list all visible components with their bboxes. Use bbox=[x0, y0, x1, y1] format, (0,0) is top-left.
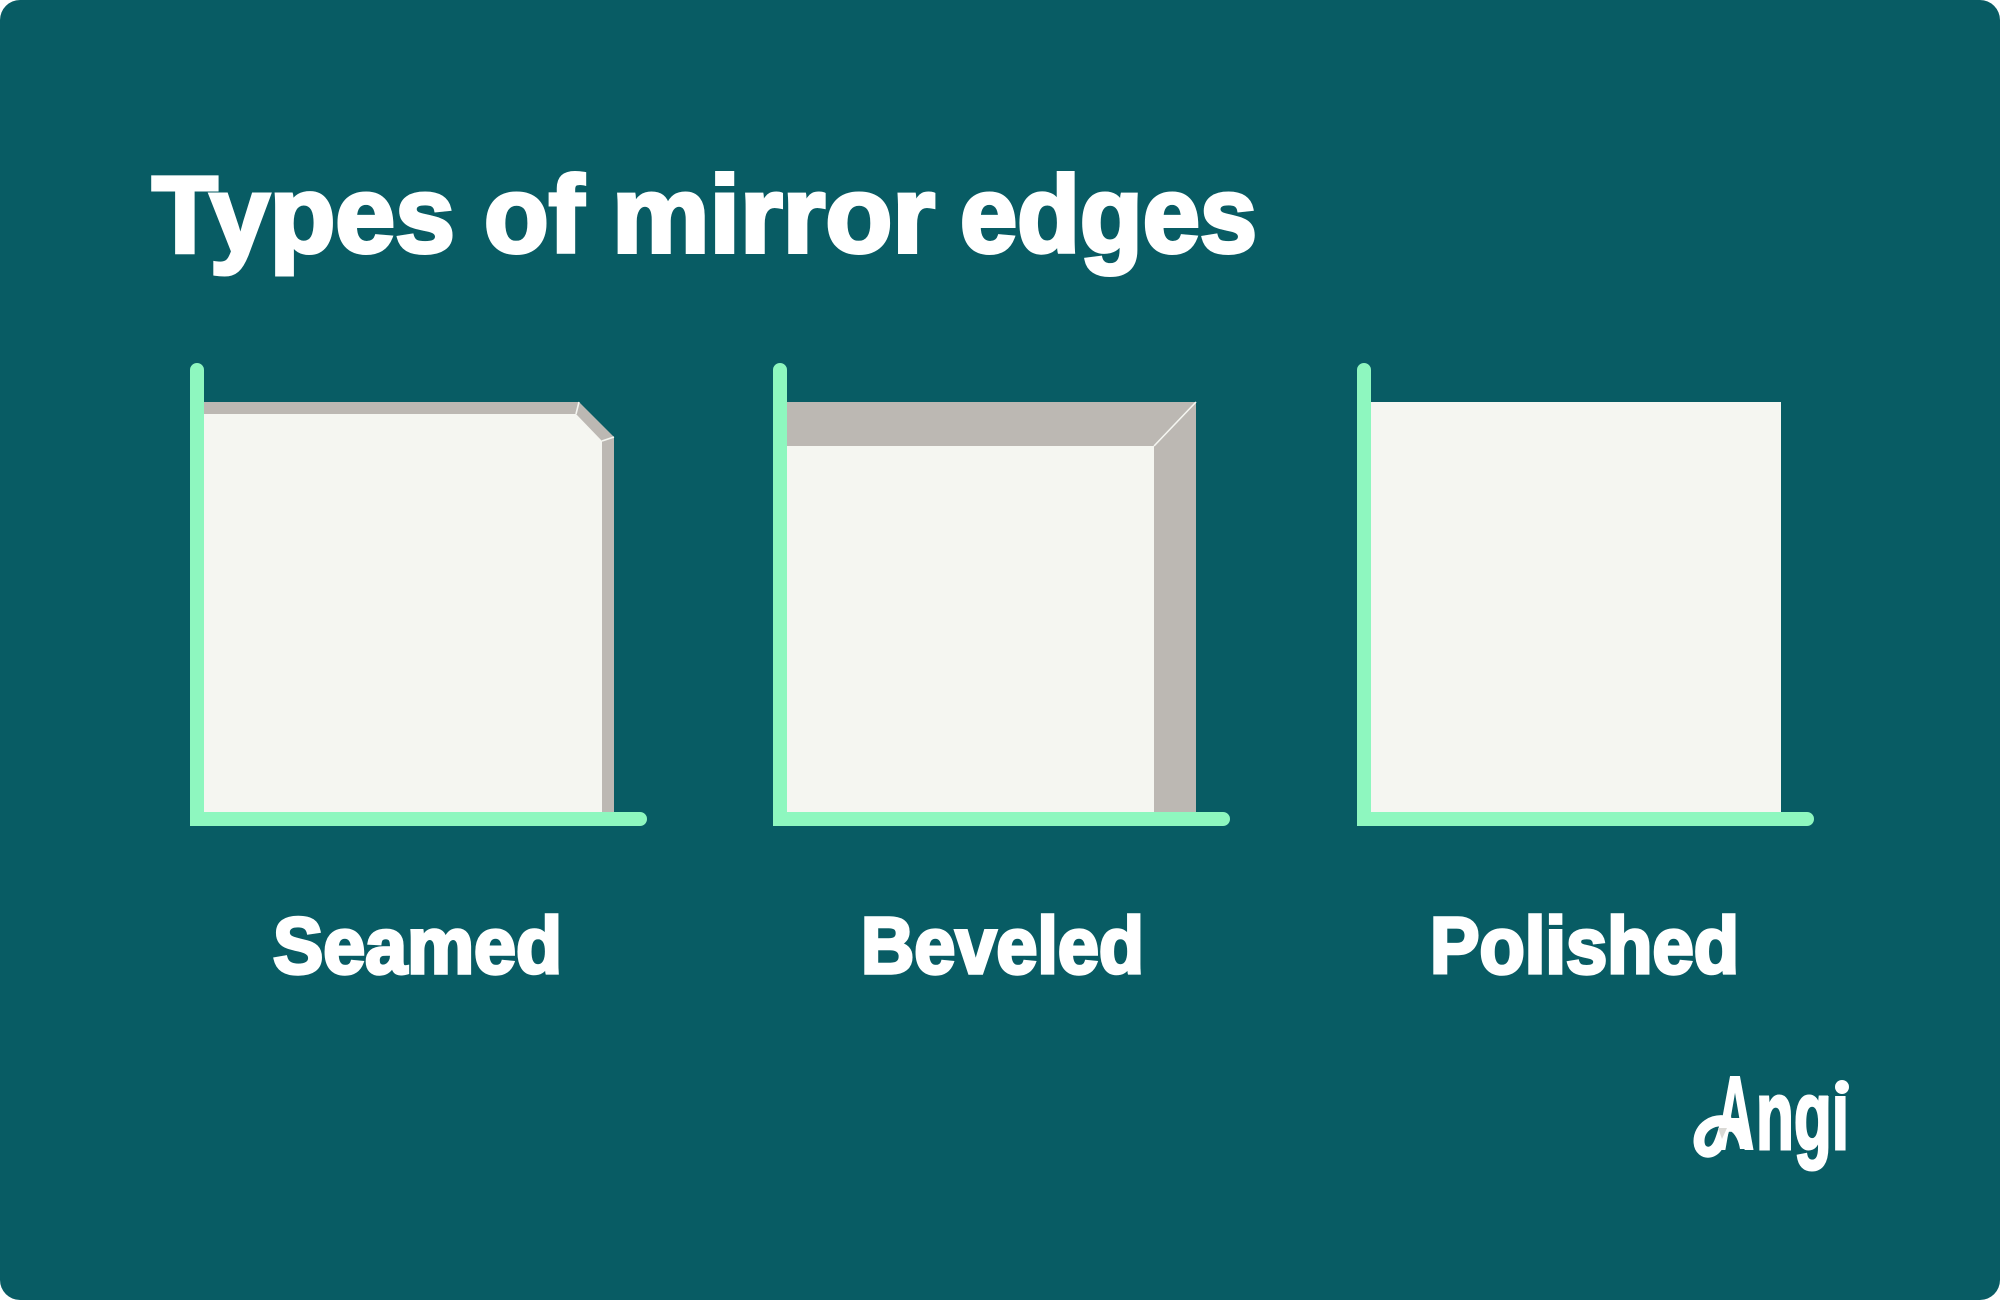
label: beveled: Beveled bbox=[861, 901, 1144, 990]
title: Types bbox=[152, 154, 455, 276]
logo loop bbox=[1699, 1121, 1730, 1152]
beveled corner seam bbox=[1154, 402, 1196, 446]
polished mirror face bbox=[1371, 402, 1781, 812]
panel: polished mirror bbox=[1357, 363, 1814, 826]
logo arch bbox=[1724, 1118, 1747, 1149]
title: mirror bbox=[612, 154, 935, 276]
panel: beveled mirror bbox=[773, 363, 1230, 826]
logo background mask behind dot bbox=[1828, 1070, 1856, 1096]
seamed green frame bbox=[190, 363, 647, 826]
seamed edge seams bbox=[576, 402, 614, 441]
beveled mirror face bbox=[787, 446, 1154, 812]
beveled edge bbox=[787, 402, 1196, 812]
logo letters ngi: ngi bbox=[1756, 1060, 1849, 1170]
title: of bbox=[484, 154, 585, 276]
seamed mirror face bbox=[204, 414, 602, 812]
logo dot bbox=[1835, 1080, 1849, 1094]
title: edges bbox=[960, 154, 1257, 276]
label: polished: Polished bbox=[1430, 901, 1739, 990]
logo fold bbox=[1718, 1128, 1727, 1139]
polished green frame bbox=[1357, 363, 1814, 826]
beveled green frame bbox=[773, 363, 1230, 826]
seamed top and corner edge bbox=[204, 402, 614, 812]
panel: seamed mirror bbox=[190, 363, 647, 826]
logo letter A: A bbox=[1716, 1056, 1754, 1172]
logo: Angi bbox=[1699, 1056, 1856, 1172]
label: seamed: Seamed bbox=[273, 901, 562, 990]
title bbox=[152, 154, 1257, 276]
